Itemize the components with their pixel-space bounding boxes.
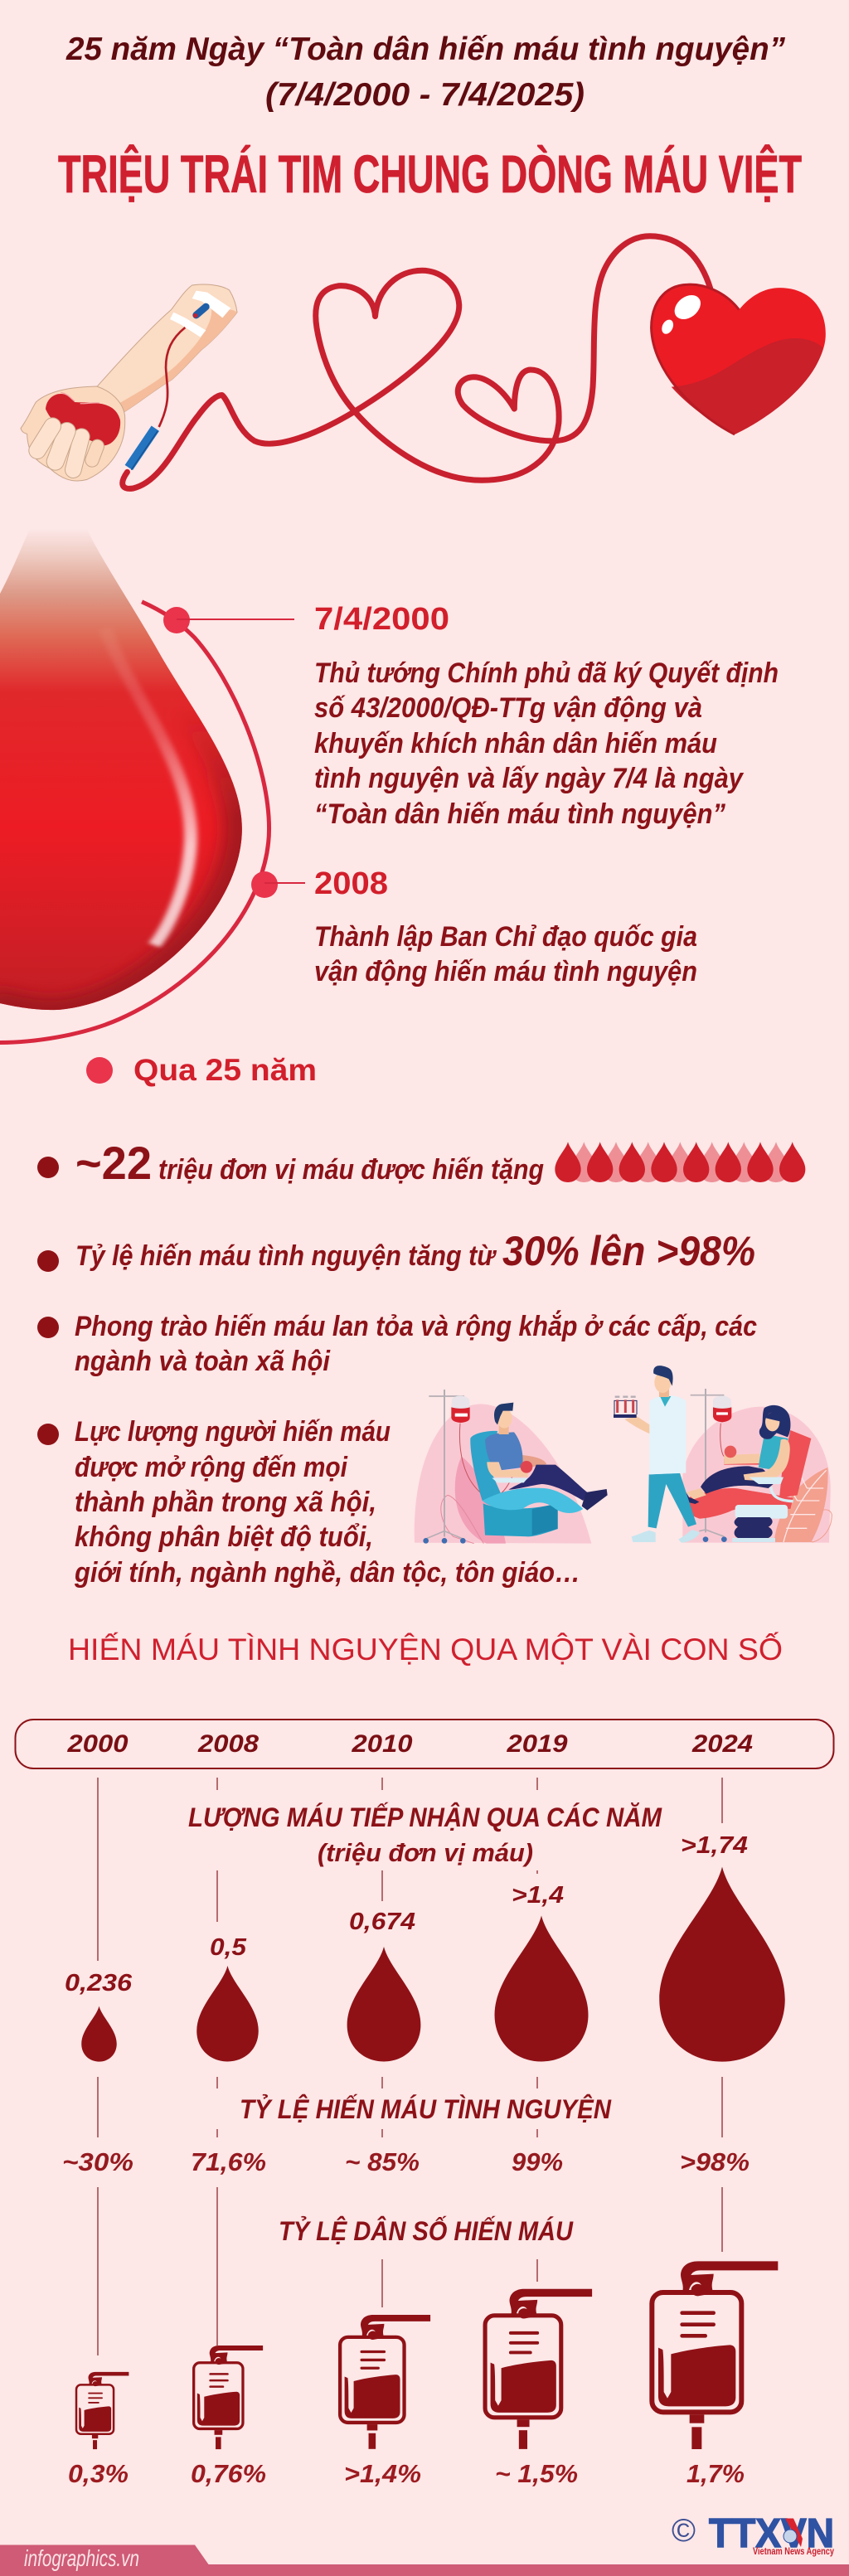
illustration: doctor and female donor [614,1366,832,1543]
population share values: 0,76% [191,2459,266,2488]
description [314,921,697,987]
year labels: 2010 [351,1730,413,1758]
TTXVN logo: TTXVN [709,2511,834,2556]
drop 2000 [65,1970,133,2062]
hand [21,386,125,481]
bullet: 22 million units: ~22 [75,1137,152,1189]
rate values: 99% [512,2147,563,2176]
bullet: donors: không phân biệt độ tuổi, [75,1521,373,1553]
bullet: voluntary rate: 30% lên >98% [502,1228,755,1274]
chair [470,1431,502,1501]
footer band [0,2545,849,2576]
blood bag [713,1395,731,1409]
description: Thành lập Ban Chỉ đạo quốc gia [314,921,697,953]
drop 2019 [494,1882,589,2061]
chart heading: TỶ LỆ DÂN SỐ HIẾN MÁU [279,2216,574,2246]
year labels: 2019 [506,1730,568,1758]
chart heading: TỶ LỆ HIẾN MÁU TÌNH NGUYỆN [240,2094,612,2124]
chart heading [188,1802,662,1867]
date: 7/4/2000 [314,602,449,637]
bullet: donors: được mở rộng đến mọi [75,1452,348,1483]
description: “Toàn dân hiến máu tình nguyện” [314,798,725,830]
thin blood line [159,327,185,427]
bullet: 22 million units: triệu đơn vị máu được hiến tặng [158,1154,544,1186]
description: Thủ tướng Chính phủ đã ký Quyết định [314,657,779,689]
blood bag 2008 [194,2346,263,2449]
illustration: tube with hearts [123,236,826,488]
population share values: >1,4% [344,2459,421,2488]
blue tube connector [129,429,155,468]
chart heading: (triệu đơn vị máu) [318,1838,533,1867]
chart: voluntary donation rate [62,2094,750,2176]
bandages [170,291,230,337]
year labels: 2000 [66,1730,129,1758]
rate values: >98% [680,2147,750,2176]
woman arm and ball [724,1453,760,1464]
IV pole [691,1389,724,1536]
rate values: 71,6% [191,2147,266,2176]
description: khuyến khích nhân dân hiến máu [314,728,717,759]
red tube forming hearts [123,236,711,488]
bullet: donors: thành phần trong xã hội, [75,1487,376,1518]
description: tình nguyện và lấy ngày 7/4 là ngày [314,763,745,794]
blood bag 2010 [340,2315,430,2449]
blood bag 2000 [76,2372,129,2449]
doctor coat [649,1395,686,1474]
description: vận động hiến máu tình nguyện [314,956,697,987]
woman legs [701,1466,777,1494]
icon row: blood drops [555,1142,805,1182]
woman torso [759,1434,788,1470]
legs [508,1465,587,1501]
drop 2010 [347,1909,420,2061]
icon: big red heart [652,284,826,434]
year timeline bar [15,1720,834,1768]
subtitle line 2: (7/4/2000 - 7/4/2025) [265,77,585,113]
bullet: movement: Phong trào hiến máu lan tỏa và rộng khắp ở các cấp, các [75,1311,757,1342]
population share values: 1,7% [686,2459,745,2488]
blood bag 2019 [485,2289,592,2449]
footer band: infographics.vn [24,2545,139,2571]
forearm [97,284,237,412]
drop 2024: >1,74 [681,1832,748,1859]
bullet: movement [37,1311,757,1377]
doctor arm [624,1416,649,1434]
milestone 7/4/2000 [314,602,779,830]
column connector lines [98,1778,722,2355]
chair [779,1430,811,1498]
timeline: big blood drop [0,529,305,1042]
chart: blood received per year [65,1802,785,2062]
bullet: donors: giới tính, ngành nghề, dân tộc, tôn giáo… [74,1557,580,1589]
drop 2010: 0,674 [349,1909,415,1935]
doctor trousers [648,1473,696,1528]
drop 2008 [196,1934,259,2061]
test tube rack [614,1397,637,1418]
drop 2019: >1,4 [512,1882,564,1909]
blood bag 2024 [652,2261,778,2449]
year labels [66,1730,753,1758]
IV pole [426,1390,464,1539]
illustration: arm donating blood [21,284,237,481]
population share values [68,2459,745,2488]
torso [485,1432,523,1470]
description [314,657,779,830]
year labels: 2008 [197,1730,259,1758]
population share values: 0,3% [68,2459,129,2488]
bullet: voluntary rate: Tỷ lệ hiến máu tình nguyện tăng từ [75,1240,497,1272]
drop shape [0,529,269,1042]
needle [196,307,206,315]
bullet: 22 million units [37,1137,805,1189]
population share values: ~ 1,5% [495,2459,578,2488]
bullet: donors: Lực lượng người hiến máu [75,1416,391,1448]
bullet: movement: ngành và toàn xã hội [75,1346,331,1377]
stress ball [46,394,120,445]
bullet: donors [37,1416,580,1589]
TTXVN logo: © [672,2513,696,2549]
year labels: 2024 [691,1730,753,1758]
drop 2008: 0,5 [210,1934,247,1961]
chart heading: LƯỢNG MÁU TIẾP NHẬN QUA CÁC NĂM [188,1802,662,1832]
illustration: male donor [415,1390,608,1544]
section heading: key figures: HIẾN MÁU TÌNH NGUYỆN QUA MỘT VÀI CON SỐ [68,1632,783,1666]
head [499,1424,509,1434]
chart: share of population donating [68,2216,778,2488]
drop 2024 [659,1832,785,2062]
doctor head [659,1389,669,1397]
woman head [759,1405,790,1439]
leaf [774,1467,828,1542]
blood bag [451,1395,470,1409]
description: số 43/2000/QĐ-TTg vận động và [314,692,702,724]
header text [58,32,802,204]
rate values [62,2147,750,2176]
date: 2008 [314,866,388,901]
subtitle line 1: 25 năm Ngày “Toàn dân hiến máu tình nguyện” [65,32,785,67]
milestone 2008 [314,866,697,987]
fingers [37,426,97,470]
arm [487,1462,528,1477]
rate values: ~30% [62,2147,133,2176]
marker 2008 [251,871,305,898]
marker 7/4/2000 [163,607,294,633]
bullet: voluntary rate [37,1228,755,1274]
section heading: Qua 25 năm: Qua 25 năm [133,1053,317,1087]
rate values: ~ 85% [345,2147,420,2176]
drop 2000: 0,236 [65,1970,133,1996]
